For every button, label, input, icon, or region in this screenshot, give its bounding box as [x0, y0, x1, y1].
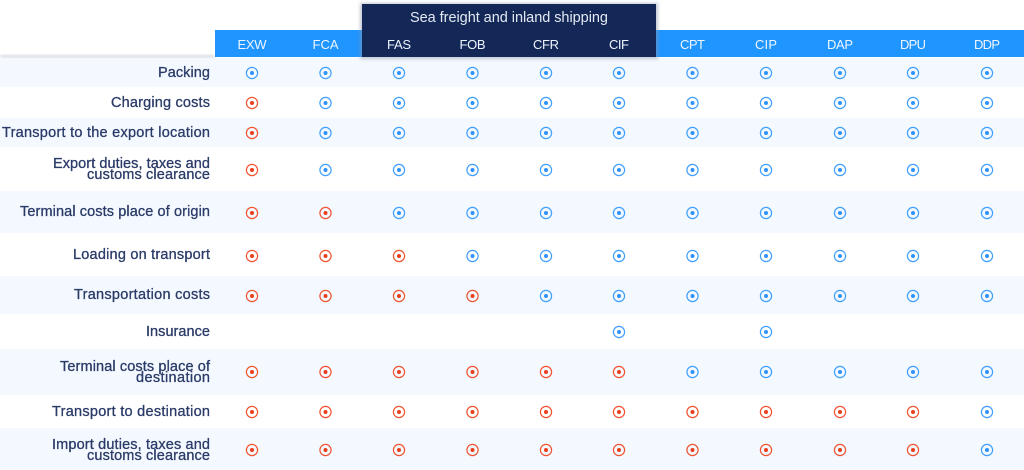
row: Transport to destination: Transport to destination: [52, 404, 210, 420]
row: Transport to the export location: Transport to the export location: [2, 125, 210, 141]
header: sea freight and inland shipping group: Sea freight and inland shipping: [410, 10, 608, 26]
header: blue Incoterms bar: CPT: [680, 37, 705, 52]
row: Export duties, taxes and customs clearance: [53, 156, 993, 183]
row: Terminal costs place of destination: Terminal costs place of: [60, 359, 211, 375]
row: Charging costs: Charging costs: [111, 95, 210, 111]
header: blue Incoterms bar: EXW: [238, 37, 267, 52]
header: sea freight and inland shipping group: [360, 3, 658, 59]
row: Loading on transport: [73, 247, 993, 263]
row: Export duties, taxes and customs clearance: Export duties, taxes and: [53, 156, 210, 172]
header: blue Incoterms bar: DAP: [827, 37, 853, 52]
row: Insurance: Insurance: [146, 324, 210, 340]
row: Export duties, taxes and customs clearance: customs clearance: [87, 167, 210, 183]
row: Transport to the export location: [2, 125, 993, 141]
header: blue Incoterms bar: DDP: [974, 37, 1000, 52]
row: Packing: [158, 65, 993, 81]
header: sea freight and inland shipping group: FAS: [387, 37, 411, 52]
row: Loading on transport: Loading on transport: [73, 247, 210, 263]
header: blue Incoterms bar: FCA: [312, 37, 339, 52]
header: sea freight and inland shipping group: FOB: [460, 37, 486, 52]
header: blue Incoterms bar: [215, 30, 1024, 57]
row: Terminal costs place of destination: [60, 359, 993, 386]
row: Charging costs: [111, 95, 993, 111]
row: Terminal costs place of origin: Terminal costs place of origin: [20, 204, 210, 220]
row: Terminal costs place of destination: destination: [136, 370, 210, 386]
row: Import duties, taxes and customs clearance: customs clearance: [87, 448, 210, 464]
header: sea freight and inland shipping group: CFR: [533, 37, 559, 52]
row: Transport to destination: [52, 404, 993, 420]
row: Transportation costs: Transportation costs: [74, 287, 210, 303]
header: blue Incoterms bar: CIP: [755, 37, 777, 52]
row: Terminal costs place of origin: [20, 204, 993, 220]
row: Insurance: [146, 324, 772, 340]
row: Import duties, taxes and customs clearance: Import duties, taxes and: [52, 437, 210, 453]
header: sea freight and inland shipping group: CIF: [609, 37, 629, 52]
row: Transportation costs: [74, 287, 993, 303]
row: Packing: Packing: [158, 65, 210, 81]
row: Import duties, taxes and customs clearance: [52, 437, 993, 464]
header: blue Incoterms bar: DPU: [900, 37, 926, 52]
